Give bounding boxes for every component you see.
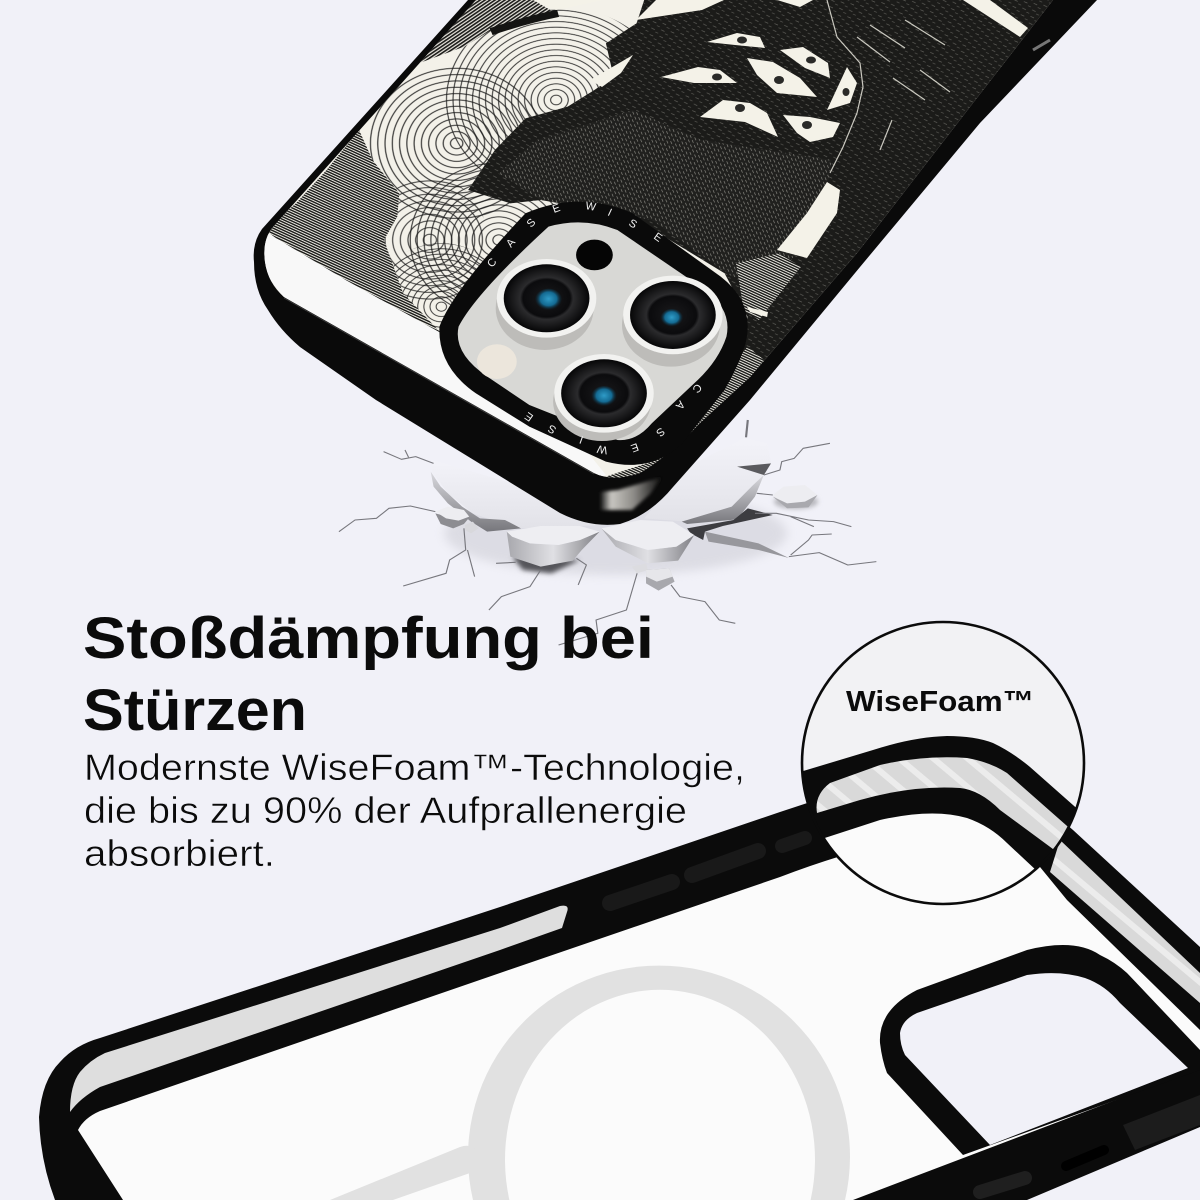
chunk left small (435, 507, 479, 533)
left plate broken side (431, 472, 521, 532)
hatched area beside and below the camera (736, 253, 801, 320)
lower right plate edge (705, 532, 789, 558)
bumper branding top: CASEWISE (485, 200, 664, 270)
hatched lower-left (265, 130, 441, 333)
description line 3: absorbiert. (84, 833, 275, 874)
text block: headline and description (83, 606, 745, 874)
illustration: cracked ground at impact point (339, 420, 876, 645)
printed back artwork (250, 0, 1092, 493)
heading line 2: Stürzen (83, 678, 307, 743)
magnified clear back (825, 814, 1034, 902)
case body (254, 0, 1097, 525)
foam strip left (70, 906, 568, 1112)
light streaks in the dark area (827, 0, 950, 173)
camera plate (458, 222, 727, 440)
lens top-left (496, 259, 596, 350)
left raised plate (432, 460, 651, 528)
magnified foam strip (817, 757, 1075, 852)
description line 2: die bis zu 90% der Aufprallenergie (84, 790, 687, 831)
foam strip right (1050, 840, 1200, 1003)
right raised plate (644, 438, 771, 522)
camera bumper ring (439, 202, 748, 465)
product: phone in case dropping onto the ground (250, 0, 1097, 525)
magnetic alignment bar (330, 1146, 481, 1200)
clear back panel (78, 836, 1200, 1200)
inner case lip highlight (284, 298, 594, 474)
camera module (439, 202, 748, 465)
chunk centre left (507, 526, 600, 567)
flash (477, 344, 517, 379)
magnifier outline (802, 622, 1084, 904)
magnifier label: WiseFoam™ (846, 686, 1034, 718)
camera cutout opening (900, 973, 1188, 1145)
magnified case corner (804, 736, 1076, 902)
lighter fur hatching (499, 110, 832, 283)
dark fissure (687, 508, 773, 540)
heading line 1: Stoßdämpfung bei (83, 606, 654, 671)
description line 1: Modernste WiseFoam™-Technologie, (84, 747, 745, 788)
hatched upper-left edge (418, 0, 556, 63)
product: transparent case seen from the inside (39, 747, 1200, 1200)
magnifier fill (802, 622, 1084, 904)
case corner gloss (600, 477, 662, 510)
side buttons (610, 838, 805, 903)
lens right (622, 276, 723, 367)
small rocks bottom (632, 563, 675, 591)
crack lines (339, 420, 876, 645)
white edge strip (258, 232, 606, 480)
wedge shadow on right plate (737, 463, 771, 475)
dark branch near the top (491, 13, 558, 32)
charging port area (980, 1095, 1200, 1192)
lens bottom (553, 354, 654, 441)
magnified frame (804, 736, 1076, 868)
crater soft shadow (444, 492, 787, 575)
eye pupils (712, 36, 850, 129)
right plate broken side (682, 475, 764, 524)
small rock right (773, 485, 818, 509)
bumper branding bottom: CASEWISE (523, 381, 704, 456)
side button highlight (1033, 40, 1050, 50)
case black frame (39, 747, 1200, 1200)
camera cutout frame (880, 945, 1200, 1155)
swirl rings (370, 10, 630, 332)
shadows below the chunks (512, 557, 580, 573)
microphone hole (576, 240, 613, 270)
magnetic charging ring (468, 966, 850, 1200)
callout: WiseFoam magnifier (800, 620, 1086, 906)
dark mass of drawing (468, 0, 1092, 383)
chunk centre right (601, 520, 694, 563)
cream shapes of the drawing (533, 0, 1028, 317)
